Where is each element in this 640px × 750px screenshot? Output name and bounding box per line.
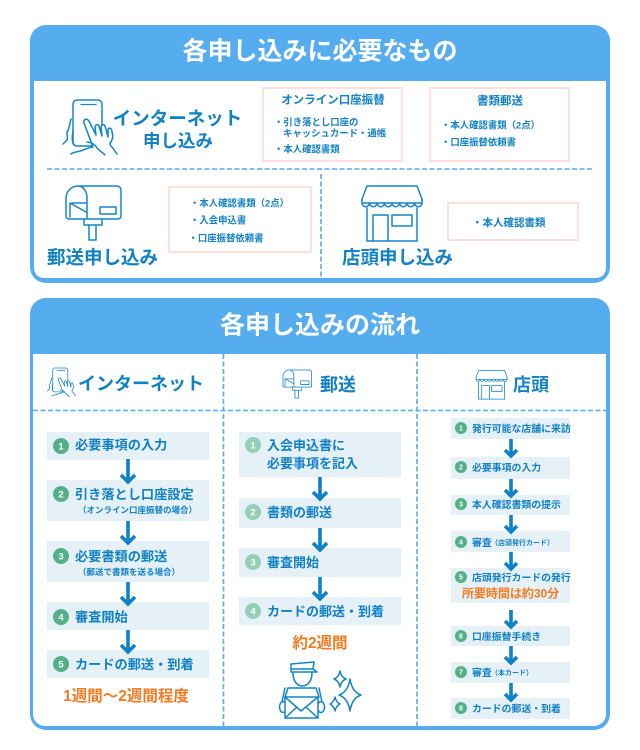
box: document mailing (430, 88, 569, 161)
icon: mailbox small (283, 370, 312, 398)
step 1: 入会申込書に (267, 438, 345, 453)
arrows (313, 477, 327, 599)
heading: store application: 店頭申し込み (342, 247, 453, 268)
panel: application flow (30, 298, 610, 730)
step 1: 1 (459, 426, 463, 432)
heading: mail application: 郵送申し込み (47, 247, 158, 268)
step 7 (451, 662, 570, 683)
arrows (505, 439, 517, 700)
box: mail documents (169, 187, 311, 252)
step 2: 書類の郵送 (267, 505, 332, 520)
step 4: 審査開始 (75, 608, 129, 624)
step 7: 7 (459, 670, 463, 676)
step 5: 所要時間は約30分 (462, 586, 559, 600)
step 1 (239, 432, 401, 477)
column: store (451, 371, 571, 719)
icon: store (362, 186, 422, 241)
step 2 (239, 498, 401, 528)
box: store documents (448, 203, 578, 240)
icon: phone and hand (63, 100, 117, 155)
box: document mailing: ・口座振替依頼書 (441, 137, 516, 148)
box: document mailing: 書類郵送 (477, 94, 523, 108)
step 2: 引き落とし口座設定 (75, 487, 194, 502)
column: mail (239, 370, 401, 718)
box: document mailing: ・本人確認書類（2点） (441, 120, 540, 131)
step 4: 審査 (472, 536, 492, 549)
step 3 (47, 541, 209, 582)
step 3 (451, 495, 570, 515)
step 6: 口座振替手続き (472, 630, 541, 643)
step 2: 2 (459, 464, 463, 472)
step 1: 発行可能な店舗に来訪 (472, 422, 571, 435)
step 3: 3 (250, 558, 256, 568)
heading: store: 店頭 (513, 375, 549, 395)
step 8 (451, 698, 570, 719)
step 8: カードの郵送・到着 (472, 702, 561, 715)
heading: application flow: 各申し込みの流れ (220, 312, 420, 340)
step 3: 3 (459, 502, 463, 508)
step 4 (47, 602, 209, 630)
step 3: 必要書類の郵送 (75, 548, 167, 564)
step 4: カードの郵送・到着 (267, 604, 384, 619)
box: online account transfer: ・本人確認書類 (274, 144, 340, 155)
column: internet (47, 368, 209, 705)
step 2: 2 (250, 508, 256, 518)
box: online account transfer: ・引き落とし口座の (274, 117, 358, 128)
box: online account transfer: オンライン口座振替 (281, 92, 385, 106)
step 5: カードの郵送・到着 (75, 656, 194, 672)
step 2: 必要事項の入力 (472, 461, 541, 474)
box: store documents: ・本人確認書類 (472, 216, 546, 229)
icon: store small (476, 371, 507, 399)
step 4: 4 (459, 540, 463, 546)
step 6: 6 (459, 634, 463, 640)
step 2: 2 (58, 490, 64, 500)
step 2 (47, 480, 209, 521)
duration: 1週間〜2週間程度 (63, 686, 189, 705)
step 1 (451, 418, 571, 439)
step 5: 5 (459, 574, 463, 582)
step 3: （郵送で書類を送る場合） (78, 567, 180, 577)
step 4: 4 (250, 606, 256, 618)
step 5: 店頭発行カードの発行 (472, 571, 571, 584)
panel: required items: 申し込み (143, 131, 213, 151)
step 7: （本カード） (491, 668, 533, 677)
box: online account transfer (263, 88, 402, 161)
step 5: 5 (58, 660, 64, 670)
duration: 約2週間 (292, 634, 348, 652)
step 3 (239, 548, 401, 577)
heading: internet application: インターネット (113, 108, 242, 129)
box: mail documents: ・本人確認書類（2点） (190, 198, 289, 209)
step 7: 審査 (472, 666, 492, 679)
box: online account transfer: キャッシュカード・通帳 (283, 128, 387, 139)
step 4: （店頭発行カード） (491, 538, 554, 547)
step 2 (451, 457, 570, 479)
step 4 (451, 531, 570, 552)
icon: phone and hand small (48, 368, 76, 397)
step 3: 審査開始 (267, 555, 319, 570)
icon: postman with envelope (280, 662, 324, 718)
step 8: 8 (459, 706, 463, 712)
step 6 (451, 626, 570, 646)
step 3: 3 (58, 552, 64, 562)
step 1: 1 (250, 440, 256, 452)
step 5 (47, 650, 209, 678)
icon: sparkles (330, 671, 361, 711)
heading: mail: 郵送 (320, 375, 356, 395)
step 3: 本人確認書類の提示 (472, 498, 561, 511)
step 5 (451, 568, 571, 603)
step 1: 必要事項の入力 (75, 436, 167, 452)
step 2: （オンライン口座振替の場合） (78, 505, 197, 515)
icon: mailbox (66, 186, 121, 240)
step 4: 4 (58, 612, 64, 624)
heading: internet: インターネット (78, 374, 204, 394)
step 1: 1 (58, 442, 64, 452)
box: mail documents: ・口座振替依頼書 (188, 233, 264, 244)
panel: required items (30, 25, 610, 283)
box: mail documents: ・入会申込書 (190, 215, 246, 226)
arrows (121, 459, 135, 652)
heading: required items: 各申し込みに必要なもの (182, 38, 458, 66)
step 1 (47, 432, 209, 460)
step 1: 必要事項を記入 (267, 456, 358, 471)
step 4 (239, 597, 401, 625)
